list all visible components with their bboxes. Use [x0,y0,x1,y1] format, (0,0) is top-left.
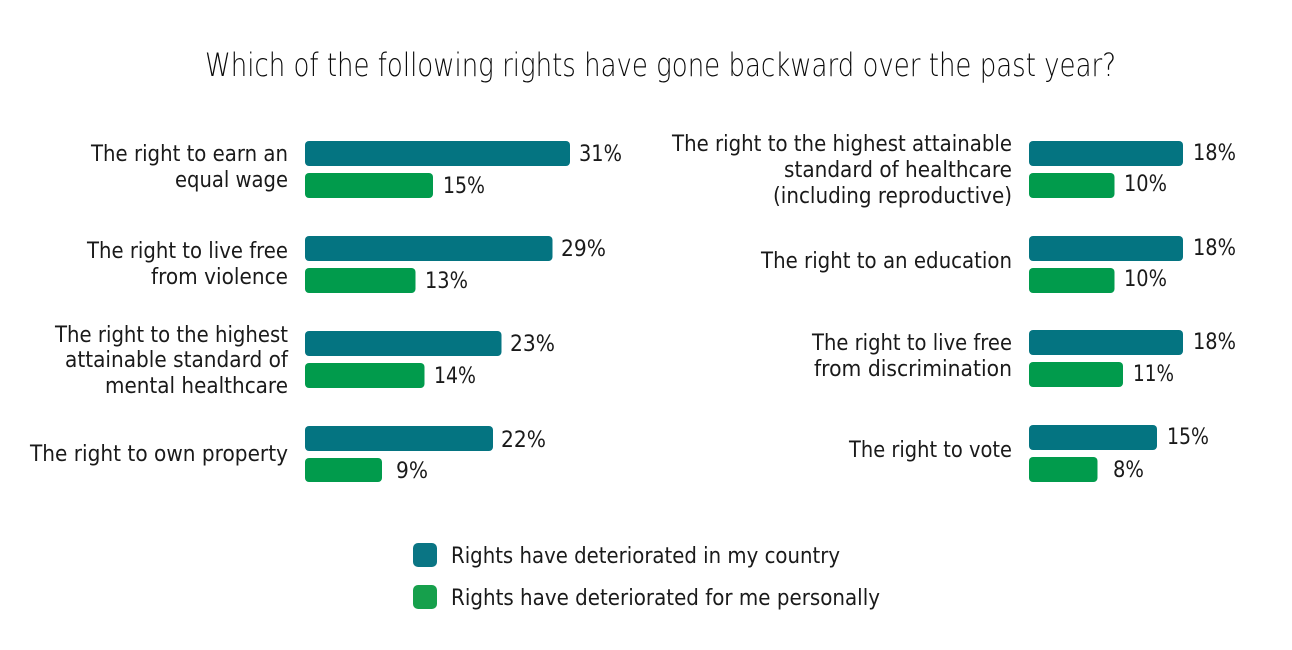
row: right to healthcare: 18% [1193,141,1236,166]
row: right to own property: The right to own property [29,442,288,467]
row: right to mental healthcare: 14% [434,364,476,389]
row: right to earn an equal wage [90,141,622,199]
row: right to an education: 18% [1193,236,1236,261]
row: right to an education: 10% [1124,267,1167,292]
row: right to live free from violence: The right to live free [86,239,288,264]
row: right to own property: 22% [501,428,546,453]
row: right to vote: The right to vote [848,438,1012,463]
row: right to earn an equal wage: The right to earn an [90,142,288,167]
row: right to own property: 9% [396,459,428,484]
row: right to an education [760,236,1236,293]
row: right to healthcare: standard of healthcare [784,158,1012,183]
row: right to an education: The right to an education [760,249,1012,274]
legend item: for me personally: Rights have deteriorated for me personally [451,586,880,611]
row: right to live free from discrimination: from discrimination [814,357,1012,382]
row: right to vote: 8% [1113,458,1144,483]
row: right to mental healthcare: 23% [510,332,555,357]
row: right to earn an equal wage: 31% [579,142,622,167]
row: right to live free from discrimination: 11% [1133,362,1174,387]
row: right to mental healthcare: mental healthcare [105,374,288,399]
row: right to live free from violence: from violence [151,265,288,290]
row: right to healthcare [671,132,1236,209]
row: right to earn an equal wage: 15% [443,174,485,199]
row: right to earn an equal wage: equal wage [175,168,288,193]
row: right to vote: 15% [1167,425,1209,450]
row: right to live free from violence: 13% [425,269,468,294]
row: right to healthcare: (including reproductive) [773,184,1012,209]
legend item: in my country: Rights have deteriorated in my country [451,544,840,569]
row: right to live free from violence: 29% [561,237,606,262]
row: right to mental healthcare: attainable standard of [65,348,289,373]
row: right to live free from discrimination: 18% [1193,330,1236,355]
row: right to mental healthcare: The right to the highest [54,323,288,348]
row: right to live free from discrimination: The right to live free [811,331,1012,356]
row: right to own property [29,426,546,484]
row: right to live free from violence [86,236,606,294]
row: right to vote [848,425,1209,483]
row: right to live free from discrimination [811,330,1236,387]
row: right to healthcare: 10% [1124,172,1167,197]
legend [413,543,880,611]
row: right to mental healthcare [54,323,555,399]
row: right to healthcare: The right to the highest attainable [671,132,1012,157]
panel: left chart [29,141,622,484]
panel: right chart [671,132,1236,483]
